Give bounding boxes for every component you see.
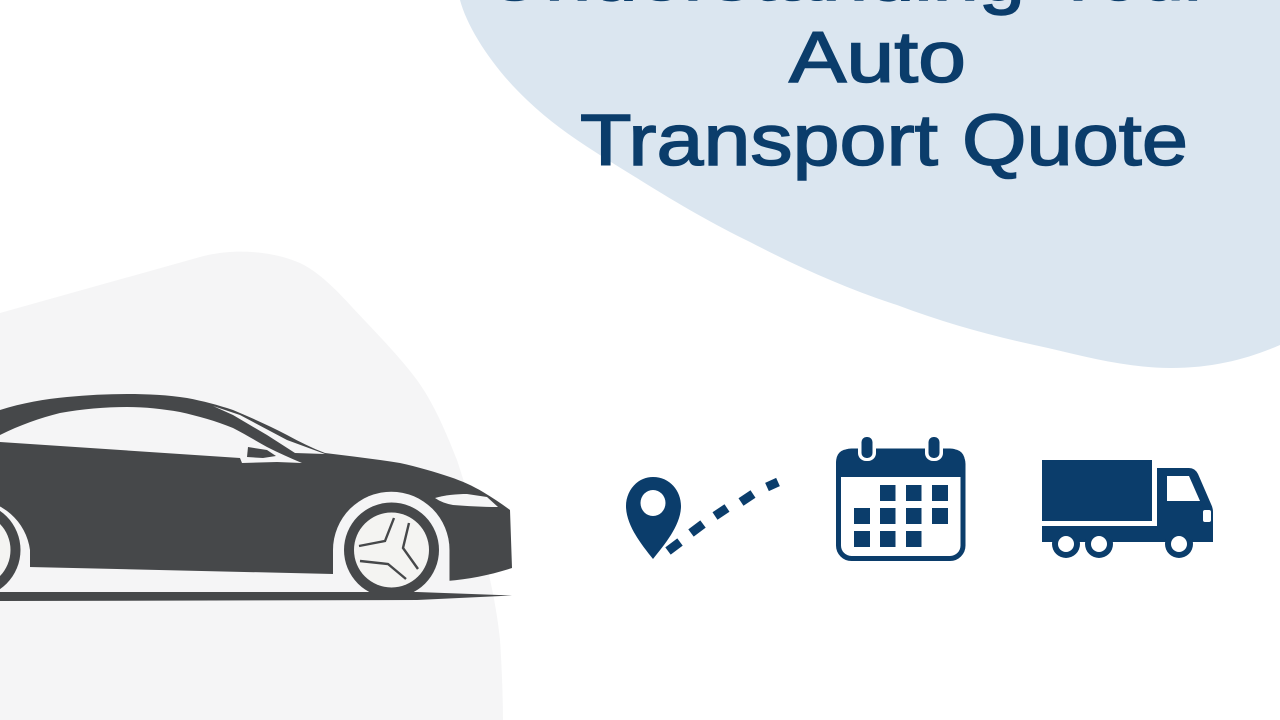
calendar date grid (854, 485, 948, 547)
icon: truck (1042, 460, 1213, 558)
title: Quote (962, 101, 1188, 181)
car mirror (247, 447, 276, 458)
title (485, 0, 1210, 181)
ground line (0, 592, 512, 601)
title: Auto (789, 18, 966, 98)
calendar header (836, 449, 965, 477)
pin (626, 477, 681, 559)
dashed route (668, 482, 778, 551)
title: Transport (580, 101, 938, 181)
car window (0, 407, 302, 463)
truck cab and chassis (1042, 468, 1213, 542)
car pillar highlight (213, 406, 325, 454)
truck cargo box (1042, 460, 1152, 521)
calendar frame (838, 451, 963, 558)
calendar tabs (858, 432, 943, 461)
panel: grey background blob (0, 252, 503, 720)
icon: calendar (836, 432, 965, 558)
icon: location pin with dashed route (626, 477, 778, 559)
rear wheel arch (0, 500, 30, 600)
icon: car (0, 394, 512, 601)
front wheel (344, 502, 439, 598)
front wheel arch (333, 492, 450, 600)
rear wheel (0, 502, 20, 598)
truck wheels (1052, 530, 1193, 558)
truck window (1167, 476, 1200, 501)
car headlight (435, 494, 498, 507)
car body (0, 394, 512, 581)
truck light (1203, 510, 1211, 522)
panel: blue background blob (460, 0, 1280, 368)
